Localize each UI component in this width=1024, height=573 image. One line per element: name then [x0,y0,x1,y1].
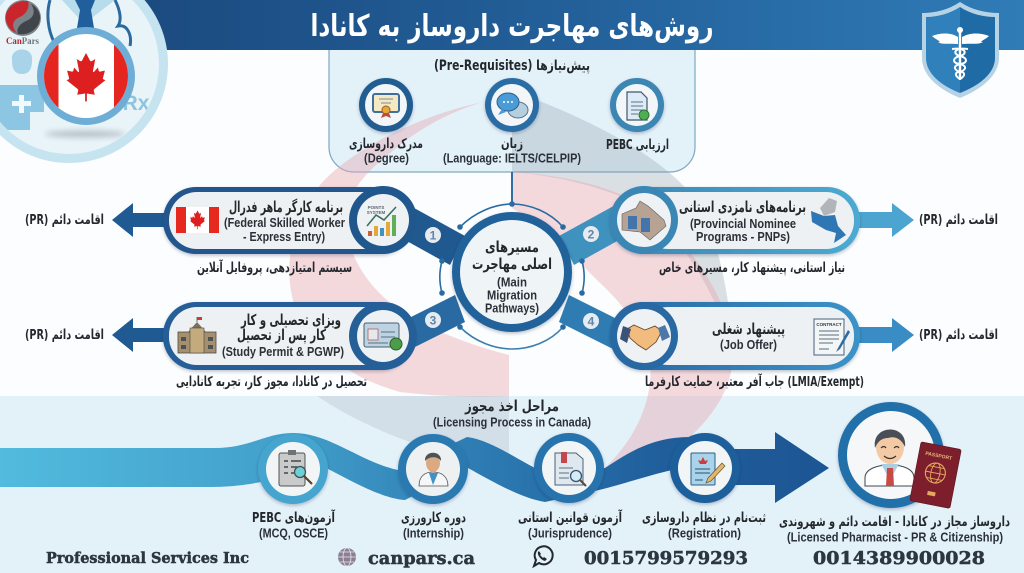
step: PEBC exams: آزمون‌های PEBC [252,509,335,526]
logo: CanPars: CanPars [6,37,39,47]
step: internship [398,434,468,540]
card: Federal Skilled Worker [112,186,417,254]
card: Federal Skilled Worker: - Express Entry) [243,229,325,244]
number badges: 1 [430,228,437,242]
heading: licensing process: مراحل اخذ مجوز [464,397,559,415]
card: Study Permit [112,302,417,370]
header banner [130,0,1024,50]
step: internship: دوره کارورزی [401,510,466,526]
card: Study Permit: کار پس از تحصیل [237,326,326,345]
footer contact row: canpars.ca [368,548,475,569]
number badges: 4 [588,314,595,328]
step: PEBC exams: (MCQ, OSCE) [259,526,328,540]
item: degree: (Degree) [364,150,409,166]
icon: clipboard [279,450,312,486]
footer contact row [46,546,985,569]
icon: WhatsApp [534,546,553,566]
caption: card 2: نیاز استانی، پیشنهاد کار، مسیرهای خاص [659,260,845,276]
hub: main migration pathways: (Main [497,274,527,290]
ribbon arrow [0,432,829,503]
card: Job Offer: پیشنهاد شغلی [712,320,785,339]
icon: Rx symbol: Rx [123,92,150,115]
icon: document check [627,92,649,120]
flag ring [37,27,135,125]
arrow: to PR [850,203,914,237]
card: Provincial Nominee [610,186,914,254]
shadow under emblem [45,130,125,138]
caption: card 4: (LMIA/Exempt) جاب آفر معتبر، حمایت کارفرما [645,373,864,390]
icon: Canada map [622,201,666,240]
step: jurisprudence: (Jurisprudence) [528,526,612,540]
connector arms to hub [405,203,619,352]
icon: Canada flag [176,207,219,233]
icon: medical case [0,85,44,130]
hub: main migration pathways [452,212,572,332]
watermark: faded logo swoosh [289,100,733,484]
icon: form with pen [691,453,725,485]
footer contact row: 0015799579293 [584,548,748,569]
outcome labels: permanent residence: اقامت دائم (PR) [25,327,104,343]
icon: pharmacist [865,429,914,486]
caption: card 1: سیستم امتیازدهی، پروفایل آنلاین [197,259,352,276]
heading: pre-requisites: پیش‌نیازها (Pre-Requisites) [434,58,590,74]
number badges [425,226,599,329]
card: Federal Skilled Worker: برنامه کارگر ماهر فدرال [229,198,343,216]
icon: handshake [620,325,670,350]
footer contact row: 0014389900028 [813,548,985,569]
step: registration [642,433,766,540]
arrow: to PR [112,203,170,237]
step: registration: (Registration) [668,526,741,540]
number badges: 3 [430,314,437,328]
connector: panel to hub [511,172,513,205]
panel border [329,50,695,172]
icon: book and magnifier [555,452,586,486]
icon: university building [178,317,216,353]
outcome labels: permanent residence: اقامت دائم (PR) [919,212,998,228]
hub decorative arcs [439,201,585,349]
card: Provincial Nominee: Programs - PNPs) [696,229,790,244]
card: Federal Skilled Worker: (Federal Skilled Worker [224,215,345,230]
item: degree: مدرک داروسازی [349,136,423,152]
hub: main migration pathways: Pathways) [485,300,539,316]
card: Provincial Nominee: برنامه‌های نامزدی استانی [679,198,806,216]
icon: points system chart [367,205,396,236]
hub: main migration pathways: مسیرهای [485,238,539,256]
icon: contract [814,319,850,355]
outcome labels: permanent residence [25,212,998,343]
outcome labels: permanent residence: اقامت دائم (PR) [919,327,998,343]
card: Study Permit: ویزای تحصیلی و کار [240,311,341,329]
emblem: Canada flag and pharmacist circle [0,0,168,163]
item: language [443,78,581,166]
flag of Canada [44,34,128,118]
panel: licensing band background [0,396,1024,573]
icon: passport [910,442,961,508]
caption: card 3: تحصیل در کانادا، مجوز کار، تجربه کانادایی [176,374,367,390]
arrow: to PR [850,318,914,352]
heading: licensing process [433,397,591,430]
card: Job Offer: (Job Offer) [720,337,777,352]
card: Provincial Nominee: (Provincial Nominee [690,216,796,231]
item: language: (Language: IELTS/CELPIP) [443,150,581,166]
icon: passport: PASSPORT [925,451,953,462]
item: PEBC assessment [606,78,669,153]
icon: contract: CONTRACT [816,322,842,327]
heading: licensing process: (Licensing Process in Canada) [433,414,591,430]
icon: diploma [373,94,399,118]
panel: pre-requisites background [329,50,695,172]
icon: points system chart: POINTS [368,205,384,210]
hub: main migration pathways: اصلی مهاجرت [472,255,552,273]
icon: faded person [12,50,32,74]
icon: provinces map [811,198,846,243]
card: Study Permit: (Study Permit & PGWP) [222,344,344,359]
item: PEBC assessment: ارزیابی PEBC [606,137,669,153]
icon: globe [338,548,356,566]
step: internship: (Internship) [403,526,464,540]
icon: doctor [419,453,448,486]
icon: open permit card [364,323,402,350]
step: licensed pharmacist [779,402,1010,544]
footer contact row: Professional Services Inc [46,549,249,567]
number badges: 2 [588,228,595,242]
item: degree [349,78,423,166]
icon: caduceus shield [922,2,999,98]
item: language: زبان [501,136,523,152]
step: PEBC exams [252,434,335,540]
icon: doctor coat and tie [48,0,131,46]
step: registration: ثبت‌نام در نظام داروسازی [642,510,766,526]
title: روش‌های مهاجرت داروساز به کانادا [310,9,714,44]
step: jurisprudence: آزمون قوانین استانی [518,509,622,526]
arrow: to PR [112,318,170,352]
card: Job Offer [610,302,914,370]
icon: speech bubbles [497,93,528,118]
icon: points system chart: SYSTEM [367,210,385,215]
logo: CanPars [5,0,41,47]
hub: main migration pathways: Migration [487,288,537,302]
outcome labels: permanent residence: اقامت دائم (PR) [25,212,104,228]
step: jurisprudence [518,433,622,540]
